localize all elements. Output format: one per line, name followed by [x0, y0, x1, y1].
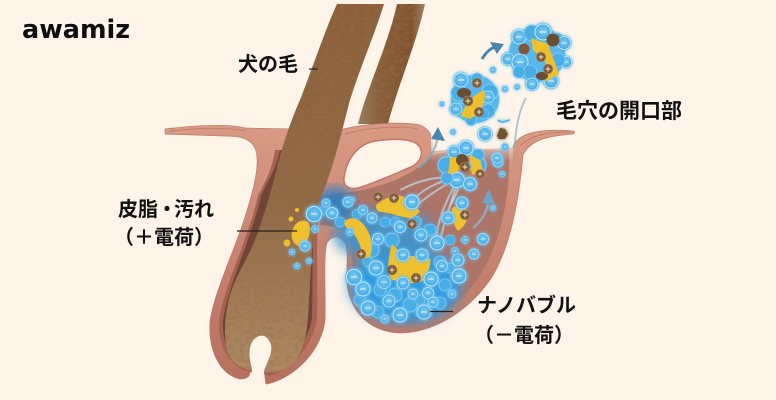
free bubbles above pore	[439, 66, 520, 164]
label: nanobubble: ナノバブル	[477, 293, 576, 317]
cluster high	[501, 22, 573, 91]
label: negative charge: （－電荷）	[474, 324, 574, 347]
plus charges	[356, 52, 553, 283]
logo: awamiz: awamiz	[22, 15, 130, 45]
nanobubbles	[288, 156, 506, 324]
back hair shaft	[358, 4, 425, 124]
front hair shaft with bulb	[225, 4, 384, 372]
nanobubbles filler	[320, 205, 455, 318]
arrow: up right	[482, 42, 504, 59]
skin and follicle	[165, 123, 574, 384]
leader lines	[237, 69, 453, 312]
skin loop opening	[344, 139, 421, 189]
light streams	[400, 178, 459, 240]
arrow: inside gland	[473, 189, 495, 228]
arrow: out of gland left	[418, 127, 445, 168]
label: positive charge: （＋電荷）	[114, 226, 214, 249]
cluster in pore	[438, 139, 486, 192]
label: dog hair: 犬の毛	[238, 53, 298, 76]
wisp at pore	[514, 98, 526, 150]
sebum on hair	[284, 208, 310, 246]
sebum blobs	[344, 195, 468, 283]
hair notch	[247, 336, 271, 387]
label: sebum and dirt: 皮脂・汚れ	[118, 198, 214, 221]
gland interior	[315, 128, 513, 325]
label: pore opening: 毛穴の開口部	[556, 100, 682, 123]
cluster low	[449, 71, 499, 126]
